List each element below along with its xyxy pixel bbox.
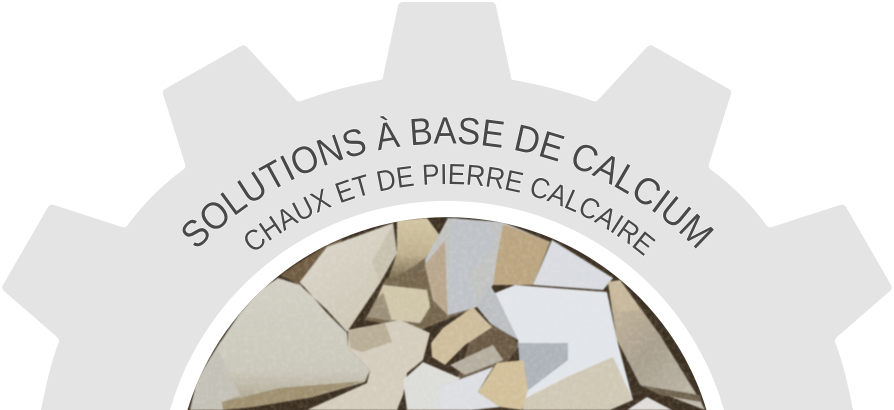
- photo: limestone rocks: [187, 217, 707, 410]
- subtitle: CHAUX ET DE PIERRE CALCAIRE: [244, 164, 656, 256]
- title: SOLUTIONS À BASE DE CALCIUM: [182, 116, 714, 249]
- white ring: [170, 201, 724, 410]
